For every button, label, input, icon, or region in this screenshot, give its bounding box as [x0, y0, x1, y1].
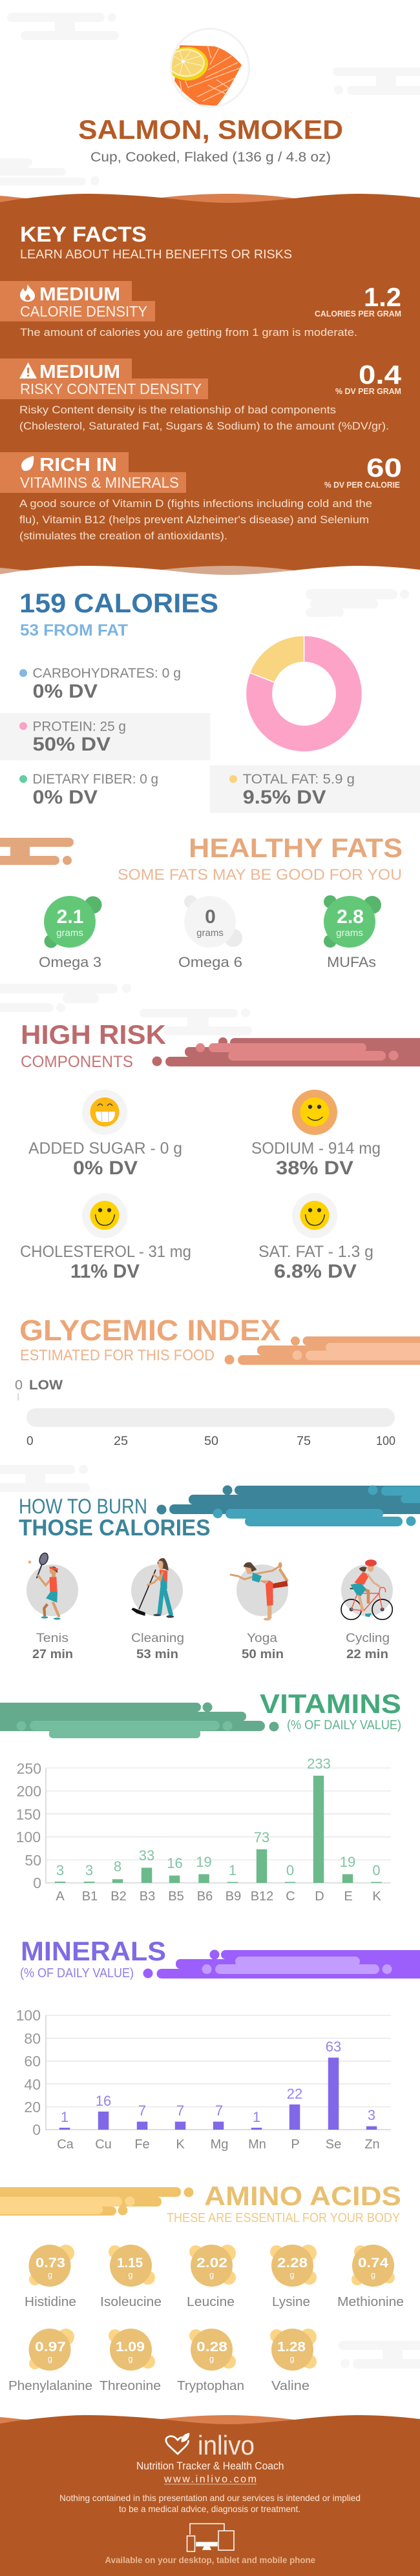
badge: omega 6	[178, 895, 242, 970]
fact: rich in vitamins and minerals: flu), Vitamin B12 (helps prevent Alzheimer's disease) and Selenium	[19, 514, 369, 526]
heading: HOW TO BURN	[19, 1495, 147, 1518]
amino: histidine: g	[48, 2270, 52, 2280]
brown background with waves	[0, 194, 420, 585]
fact: rich in vitamins and minerals: A good source of Vitamin D (fights infections including cold and the	[19, 497, 372, 510]
fact: rich in vitamins and minerals: RICH IN	[39, 455, 117, 475]
bar chart: vitamins: 8	[114, 1858, 121, 1875]
fact: rich in vitamins and minerals: 60	[366, 453, 402, 483]
bar chart: minerals: 20	[24, 2099, 41, 2115]
activity: cleaning	[131, 1558, 184, 1661]
fact: risky content density: (Cholesterol, Saturated Fat, Sugars & Sodium) to the amount (%DV/gr).	[19, 420, 389, 432]
icon: leaf	[21, 456, 34, 471]
fact: calorie density	[0, 281, 401, 338]
item: saturated fat: 6.8% DV	[274, 1261, 357, 1282]
amino: leucine: Leucine	[187, 2295, 235, 2309]
subheading: SOME FATS MAY BE GOOD FOR YOU	[118, 866, 402, 884]
bar chart: vitamins: B5	[168, 1889, 184, 1904]
bar chart: vitamins: 100	[16, 1829, 41, 1845]
panel: healthy fats	[0, 833, 403, 970]
decorative clouds	[0, 13, 420, 185]
heading: HEALTHY FATS	[189, 833, 403, 863]
gauge value marker	[15, 1378, 63, 1400]
bar chart: vitamins: 73	[254, 1829, 269, 1845]
subheading: 53 FROM FAT	[20, 621, 128, 639]
donut chart	[246, 636, 362, 752]
item: cholesterol: CHOLESTEROL - 31 mg	[20, 1243, 191, 1261]
bar chart: minerals: 63	[326, 2039, 341, 2055]
badge: MUFAs: 2.8	[337, 906, 364, 928]
bar chart: vitamins: 3	[56, 1862, 64, 1878]
bar chart: minerals: 7	[138, 2103, 146, 2119]
amino: isoleucine	[100, 2245, 162, 2309]
item: added sugar	[28, 1090, 182, 1179]
fact: risky content density: Risky Content density is the relationship of bad components	[19, 404, 336, 416]
amino: leucine	[187, 2245, 236, 2309]
heading: THOSE CALORIES	[19, 1515, 211, 1541]
bar chart: minerals: Zn	[364, 2137, 380, 2152]
legend: protein: 50% DV	[32, 734, 110, 755]
bar chart: minerals: 100	[16, 2007, 41, 2024]
legend: carbohydrates: CARBOHYDRATES: 0 g	[32, 666, 181, 681]
decorative bars	[0, 2187, 194, 2216]
heading: AMINO ACIDS	[204, 2181, 401, 2211]
amino: histidine: Histidine	[25, 2295, 76, 2309]
logo	[166, 2430, 255, 2460]
panel: amino acids	[0, 2181, 420, 2393]
item: saturated fat	[258, 1193, 373, 1282]
bar chart: vitamins: B1	[82, 1889, 98, 1904]
website link: www.inlivo.com	[163, 2474, 257, 2485]
bar chart: minerals	[16, 2007, 391, 2152]
amino: phenylalanine	[8, 2329, 92, 2393]
bar chart: minerals: Mn	[248, 2137, 266, 2152]
fact: calorie density: The amount of calories you are getting from 1 gram is moderate.	[20, 326, 357, 338]
bar chart: minerals: P	[291, 2137, 300, 2152]
activity: tennis	[26, 1552, 78, 1661]
item: cholesterol	[20, 1193, 191, 1282]
decorative bars	[225, 1336, 420, 1365]
figure: person sweeping	[131, 1558, 174, 1618]
fact: risky content density: RISKY CONTENT DENSITY	[20, 380, 202, 397]
subheading: ESTIMATED FOR THIS FOOD	[20, 1347, 215, 1364]
bar chart: vitamins: 16	[167, 1855, 183, 1871]
amino: histidine: 0.73	[36, 2256, 65, 2270]
bar chart: vitamins: 0	[33, 1875, 41, 1891]
bar chart: vitamins	[16, 1756, 391, 1904]
fact: calorie density: 1.2	[364, 282, 401, 312]
gauge scale: 50	[204, 1435, 218, 1448]
amino: lysine	[270, 2245, 317, 2309]
amino: threonine: 1.09	[116, 2340, 145, 2354]
bar chart: minerals: Cu	[95, 2137, 112, 2152]
icon: heart with leaf	[166, 2433, 189, 2454]
activity: cycling	[341, 1559, 393, 1661]
bar chart: vitamins: 0	[286, 1862, 294, 1878]
bar chart: vitamins: K	[372, 1889, 381, 1904]
gauge scale: 75	[297, 1435, 311, 1448]
gauge scale	[26, 1435, 395, 1448]
amino: methionine: Methionine	[337, 2295, 404, 2309]
bar chart: minerals: 1	[61, 2109, 68, 2125]
panel: glycemic index	[15, 1314, 420, 1448]
header section	[0, 13, 420, 185]
fact: risky content density: % DV PER GRAM	[335, 386, 401, 396]
bar chart: minerals: 7	[176, 2103, 184, 2119]
bar chart: vitamins: B9	[226, 1889, 241, 1904]
legend: dietary fiber	[19, 772, 158, 808]
heading	[19, 1495, 211, 1541]
item: sodium: 38% DV	[276, 1158, 353, 1179]
legend: dietary fiber: 0% DV	[32, 787, 98, 808]
badge: omega 3: Omega 3	[39, 954, 101, 970]
heading: 159 CALORIES	[19, 588, 218, 618]
bar chart: minerals: Ca	[57, 2137, 74, 2152]
subheading: COMPONENTS	[21, 1053, 133, 1071]
legend: protein: PROTEIN: 25 g	[32, 720, 126, 734]
gauge scale: 0	[26, 1435, 34, 1448]
bar chart: vitamins: 0	[372, 1862, 381, 1878]
fact: risky content density: 0.4	[359, 360, 401, 390]
item: sodium: SODIUM - 914 mg	[251, 1139, 381, 1158]
activity: cycling: Cycling	[346, 1632, 390, 1645]
activity: yoga	[230, 1562, 288, 1661]
heading	[20, 222, 292, 262]
bar chart: minerals: Mg	[211, 2137, 228, 2152]
badge: MUFAs: MUFAs	[327, 954, 376, 970]
bar chart: vitamins: B3	[140, 1889, 155, 1904]
item: sodium	[251, 1090, 381, 1179]
amino: tryptophan: 0.28	[196, 2340, 227, 2354]
heading: VITAMINS	[260, 1688, 401, 1719]
icon: small smile face	[300, 1097, 330, 1127]
amino: valine: 1.28	[277, 2340, 306, 2354]
amino: phenylalanine: Phenylalanine	[8, 2379, 92, 2393]
amino: tryptophan	[177, 2329, 244, 2393]
amino: methionine: 0.74	[358, 2256, 388, 2270]
badge: omega 6: Omega 6	[178, 954, 242, 970]
brown background with wave	[0, 2415, 420, 2576]
bar chart: vitamins: 33	[139, 1847, 154, 1864]
badge: MUFAs: grams	[336, 928, 363, 939]
decorative clouds	[0, 984, 252, 1035]
heading: KEY FACTS	[20, 222, 147, 246]
disclaimer: Nothing contained in this presentation and our services is intended or implied	[59, 2493, 361, 2503]
amino: valine	[270, 2329, 317, 2393]
bar chart: minerals: 1	[253, 2109, 260, 2125]
fact: rich in vitamins and minerals	[0, 452, 402, 542]
activity: yoga: Yoga	[247, 1632, 277, 1645]
figure: tennis player	[28, 1552, 61, 1620]
panel: vitamins	[0, 1688, 401, 1904]
bar chart: vitamins: 19	[196, 1854, 212, 1870]
figure: yoga pose	[230, 1562, 288, 1621]
bar chart: minerals: 3	[368, 2107, 375, 2123]
food image: salmon with lemon	[167, 28, 249, 107]
icon: warning triangle	[19, 362, 37, 379]
amino: lysine: g	[289, 2270, 295, 2280]
badge: omega 3: grams	[56, 928, 83, 939]
activity: cleaning: 53 min	[136, 1648, 178, 1661]
amino: threonine	[100, 2329, 161, 2393]
title: SALMON, SMOKED	[78, 114, 343, 145]
bar chart: minerals: Se	[326, 2137, 341, 2152]
bar chart: vitamins: E	[344, 1889, 353, 1904]
fact: risky content density: MEDIUM	[39, 362, 120, 382]
amino: threonine: g	[128, 2354, 133, 2363]
amino: lysine: Lysine	[272, 2295, 310, 2309]
icon: smile face	[300, 1201, 330, 1230]
footer	[0, 2415, 420, 2576]
logo: inlivo	[198, 2430, 255, 2460]
legend: carbohydrates	[19, 666, 181, 702]
fact: rich in vitamins and minerals: (stimulates the creation of antioxidants).	[19, 530, 227, 542]
panel: calories	[0, 588, 420, 813]
item: cholesterol: 11% DV	[70, 1261, 140, 1282]
heading: MINERALS	[21, 1936, 166, 1966]
legend: carbohydrates: 0% DV	[32, 681, 98, 702]
gauge value marker: LOW	[29, 1378, 63, 1393]
fact: rich in vitamins and minerals: VITAMINS & MINERALS	[20, 474, 179, 491]
fact: rich in vitamins and minerals: % DV PER CALORIE	[324, 480, 400, 490]
panel: key facts	[0, 194, 420, 585]
amino: methionine: g	[371, 2270, 375, 2280]
subheading: (% OF DAILY VALUE)	[20, 1966, 134, 1980]
panel: how to burn those calories	[0, 1465, 420, 1661]
bar chart: minerals: Fe	[134, 2137, 150, 2152]
fact: calorie density: MEDIUM	[39, 284, 120, 305]
bar chart: vitamins: 1	[229, 1862, 236, 1878]
badge: omega 3: 2.1	[57, 906, 83, 928]
icon: smile face	[90, 1201, 119, 1230]
heading: GLYCEMIC INDEX	[19, 1314, 281, 1347]
figure: cyclist	[341, 1559, 392, 1619]
bar chart: minerals: 16	[96, 2093, 111, 2109]
badge: MUFAs	[324, 895, 381, 970]
decorative bars	[0, 1703, 279, 1738]
amino: valine: g	[289, 2354, 295, 2363]
decorative bars	[156, 1486, 420, 1526]
icon: devices	[187, 2524, 234, 2551]
bar chart: minerals: 7	[215, 2103, 223, 2119]
subheading: THESE ARE ESSENTIAL FOR YOUR BODY	[167, 2211, 400, 2225]
amino: methionine	[337, 2245, 404, 2309]
legend bands	[0, 713, 420, 813]
bar chart: minerals: 0	[32, 2121, 41, 2138]
bar chart: vitamins: 250	[17, 1760, 41, 1777]
activity: cleaning: Cleaning	[131, 1632, 184, 1645]
icon: flame	[20, 284, 35, 302]
legend: total fat: 9.5% DV	[243, 787, 326, 808]
decorative bars	[152, 1037, 420, 1066]
subheading: (% OF DAILY VALUE)	[287, 1718, 401, 1732]
bar chart: minerals: 40	[24, 2076, 41, 2093]
amino: tryptophan: Tryptophan	[177, 2379, 244, 2393]
disclaimer: to be a medical advice, diagnosis or treatment.	[119, 2504, 300, 2514]
activity: tennis: 27 min	[32, 1648, 73, 1661]
fact: risky content density	[0, 358, 401, 432]
amino: histidine	[25, 2245, 76, 2309]
amino: leucine: g	[209, 2270, 214, 2280]
serving subtitle: Cup, Cooked, Flaked (136 g / 4.8 oz)	[90, 150, 331, 165]
activity: tennis: Tenis	[36, 1632, 68, 1645]
bar chart: vitamins: 150	[16, 1806, 41, 1823]
availability note: Available on your desktop, tablet and mobile phone	[105, 2555, 315, 2565]
amino: phenylalanine: 0.97	[35, 2340, 66, 2354]
disclaimer	[59, 2493, 361, 2514]
decorative bars	[143, 1949, 420, 1979]
amino: leucine: 2.02	[196, 2256, 227, 2270]
gauge value marker: 0	[15, 1378, 23, 1393]
activity: cycling: 22 min	[346, 1648, 388, 1661]
panel: high risk components	[0, 984, 420, 1282]
panel: minerals	[16, 1936, 420, 2152]
legend: protein	[19, 720, 126, 755]
bar chart: vitamins: B12	[251, 1889, 273, 1904]
tagline: Nutrition Tracker & Health Coach	[136, 2460, 284, 2472]
activity: yoga: 50 min	[242, 1648, 284, 1661]
legend: dietary fiber: DIETARY FIBER: 0 g	[32, 772, 158, 787]
amino: threonine: Threonine	[100, 2379, 161, 2393]
gauge scale: 100	[376, 1435, 395, 1448]
bar chart: vitamins: 200	[17, 1783, 41, 1800]
heading: HIGH RISK	[21, 1019, 166, 1050]
amino: isoleucine: g	[128, 2270, 133, 2280]
bar chart: minerals: 80	[24, 2030, 41, 2047]
bar chart: vitamins: 50	[25, 1852, 41, 1869]
fact: calorie density: CALORIE DENSITY	[20, 303, 147, 320]
item: added sugar: 0% DV	[73, 1158, 138, 1179]
amino: isoleucine: 1.15	[117, 2256, 143, 2270]
bar chart: vitamins: 233	[307, 1756, 331, 1772]
decorative cloud	[0, 1465, 90, 1492]
bar chart: vitamins: A	[56, 1889, 65, 1904]
bar chart: vitamins: B6	[197, 1889, 213, 1904]
amino: lysine: 2.28	[277, 2256, 308, 2270]
bar chart: vitamins: B2	[110, 1889, 127, 1904]
decorative cloud	[306, 589, 409, 617]
icon: grinning face	[90, 1097, 119, 1127]
bar chart: minerals: K	[176, 2137, 185, 2152]
gauge scale: 25	[114, 1435, 128, 1448]
item: added sugar: ADDED SUGAR - 0 g	[28, 1139, 182, 1158]
amino: isoleucine: Isoleucine	[100, 2295, 162, 2309]
item: saturated fat: SAT. FAT - 1.3 g	[258, 1243, 373, 1261]
heading: LEARN ABOUT HEALTH BENEFITS OR RISKS	[20, 248, 292, 262]
bar chart: vitamins: C	[286, 1889, 295, 1904]
amino: phenylalanine: g	[48, 2354, 52, 2363]
badge: omega 3	[39, 896, 102, 970]
legend: total fat	[229, 772, 355, 808]
bar chart: minerals: 22	[287, 2086, 302, 2102]
fact: calorie density: CALORIES PER GRAM	[315, 309, 401, 318]
amino: valine: Valine	[271, 2379, 310, 2393]
bar chart: vitamins: 19	[340, 1854, 355, 1870]
decorative cloud	[339, 2341, 420, 2369]
badge: omega 6: 0	[205, 906, 216, 928]
bar chart: minerals: 60	[24, 2053, 41, 2070]
badge: omega 6: grams	[196, 928, 224, 939]
decorative bars	[0, 838, 74, 865]
amino: tryptophan: g	[209, 2354, 214, 2363]
legend: total fat: TOTAL FAT: 5.9 g	[243, 772, 355, 787]
bar chart: vitamins: D	[315, 1889, 324, 1904]
bar chart: vitamins: 3	[85, 1862, 93, 1878]
gauge track	[26, 1408, 395, 1427]
